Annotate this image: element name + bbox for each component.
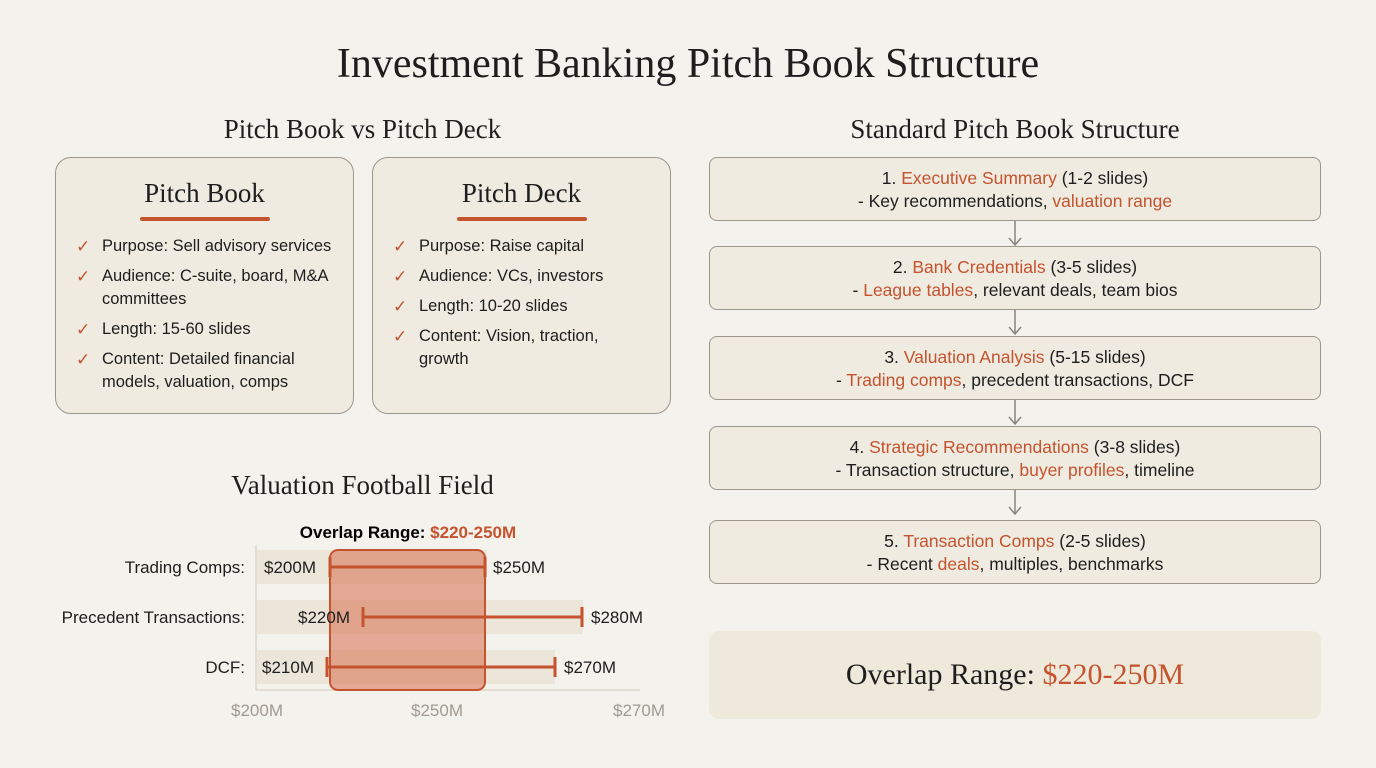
chart: football field: $250M xyxy=(493,558,545,577)
callout: overlap range: Overlap Range: $220-250M xyxy=(846,658,1184,691)
panel: pitch deck xyxy=(372,157,671,414)
heading: standard pitch book structure: Standard Pitch Book Structure xyxy=(850,114,1180,144)
panel: pitch deck: Pitch Deck xyxy=(462,178,581,208)
chart: football field: $250M xyxy=(411,701,463,720)
step 4 xyxy=(709,426,1321,490)
arrow 1 xyxy=(1008,221,1022,246)
step 3: - Trading comps, precedent transactions, DCF xyxy=(836,370,1194,390)
chart: football field: Precedent Transactions: xyxy=(62,608,245,627)
chart: football field: $220M xyxy=(298,608,350,627)
panel: pitch book xyxy=(55,157,354,414)
panel: pitch deck: Audience: VCs, investors xyxy=(419,267,603,285)
chart: football field: $270M xyxy=(564,658,616,677)
chart: football field: $200M xyxy=(264,558,316,577)
step 1: - Key recommendations, valuation range xyxy=(858,191,1172,211)
step 5: - Recent deals, multiples, benchmarks xyxy=(867,554,1163,574)
chart: football field: DCF: xyxy=(205,658,245,677)
step 4: - Transaction structure, buyer profiles, timeline xyxy=(836,460,1194,480)
chart: football field: $210M xyxy=(262,658,314,677)
step 2 xyxy=(709,246,1321,310)
panel: pitch book: Content: Detailed financial models, valuation, comps xyxy=(102,350,295,391)
callout: overlap range xyxy=(709,631,1321,719)
step 4: 4. Strategic Recommendations (3-8 slides) xyxy=(850,437,1180,457)
panel: pitch book: Purpose: Sell advisory services xyxy=(102,237,331,255)
heading: valuation football field: Valuation Football Field xyxy=(231,470,494,500)
heading: pitch book vs pitch deck: Pitch Book vs Pitch Deck xyxy=(224,114,501,144)
arrow 2 xyxy=(1008,310,1022,335)
panel: pitch deck: Purpose: Raise capital xyxy=(419,237,584,255)
chart: football field: $200M xyxy=(231,701,283,720)
chart: football field: Overlap Range: $220-250M xyxy=(300,523,516,542)
panel: pitch book: Pitch Book xyxy=(144,178,265,208)
step 3 xyxy=(709,336,1321,400)
chart: football field: Trading Comps: xyxy=(125,558,245,577)
panel: pitch book: Length: 15-60 slides xyxy=(102,320,251,338)
chart: football field xyxy=(62,523,665,720)
step 5: 5. Transaction Comps (2-5 slides) xyxy=(884,531,1146,551)
step 2: - League tables, relevant deals, team bios xyxy=(853,280,1177,300)
chart: football field: $280M xyxy=(591,608,643,627)
step 5 xyxy=(709,520,1321,584)
step 1 xyxy=(709,157,1321,221)
step 3: 3. Valuation Analysis (5-15 slides) xyxy=(884,347,1146,367)
arrow 3 xyxy=(1008,400,1022,425)
arrow 4 xyxy=(1008,490,1022,515)
step 1: 1. Executive Summary (1-2 slides) xyxy=(882,168,1148,188)
chart: football field: $270M xyxy=(613,701,665,720)
title: Investment Banking Pitch Book Structure xyxy=(337,41,1039,87)
panel: pitch deck: Content: Vision, traction, growth xyxy=(419,327,598,368)
panel: pitch book: Audience: C-suite, board, M&A committees xyxy=(102,267,328,308)
step 2: 2. Bank Credentials (3-5 slides) xyxy=(893,257,1137,277)
panel: pitch deck: Length: 10-20 slides xyxy=(419,297,568,315)
